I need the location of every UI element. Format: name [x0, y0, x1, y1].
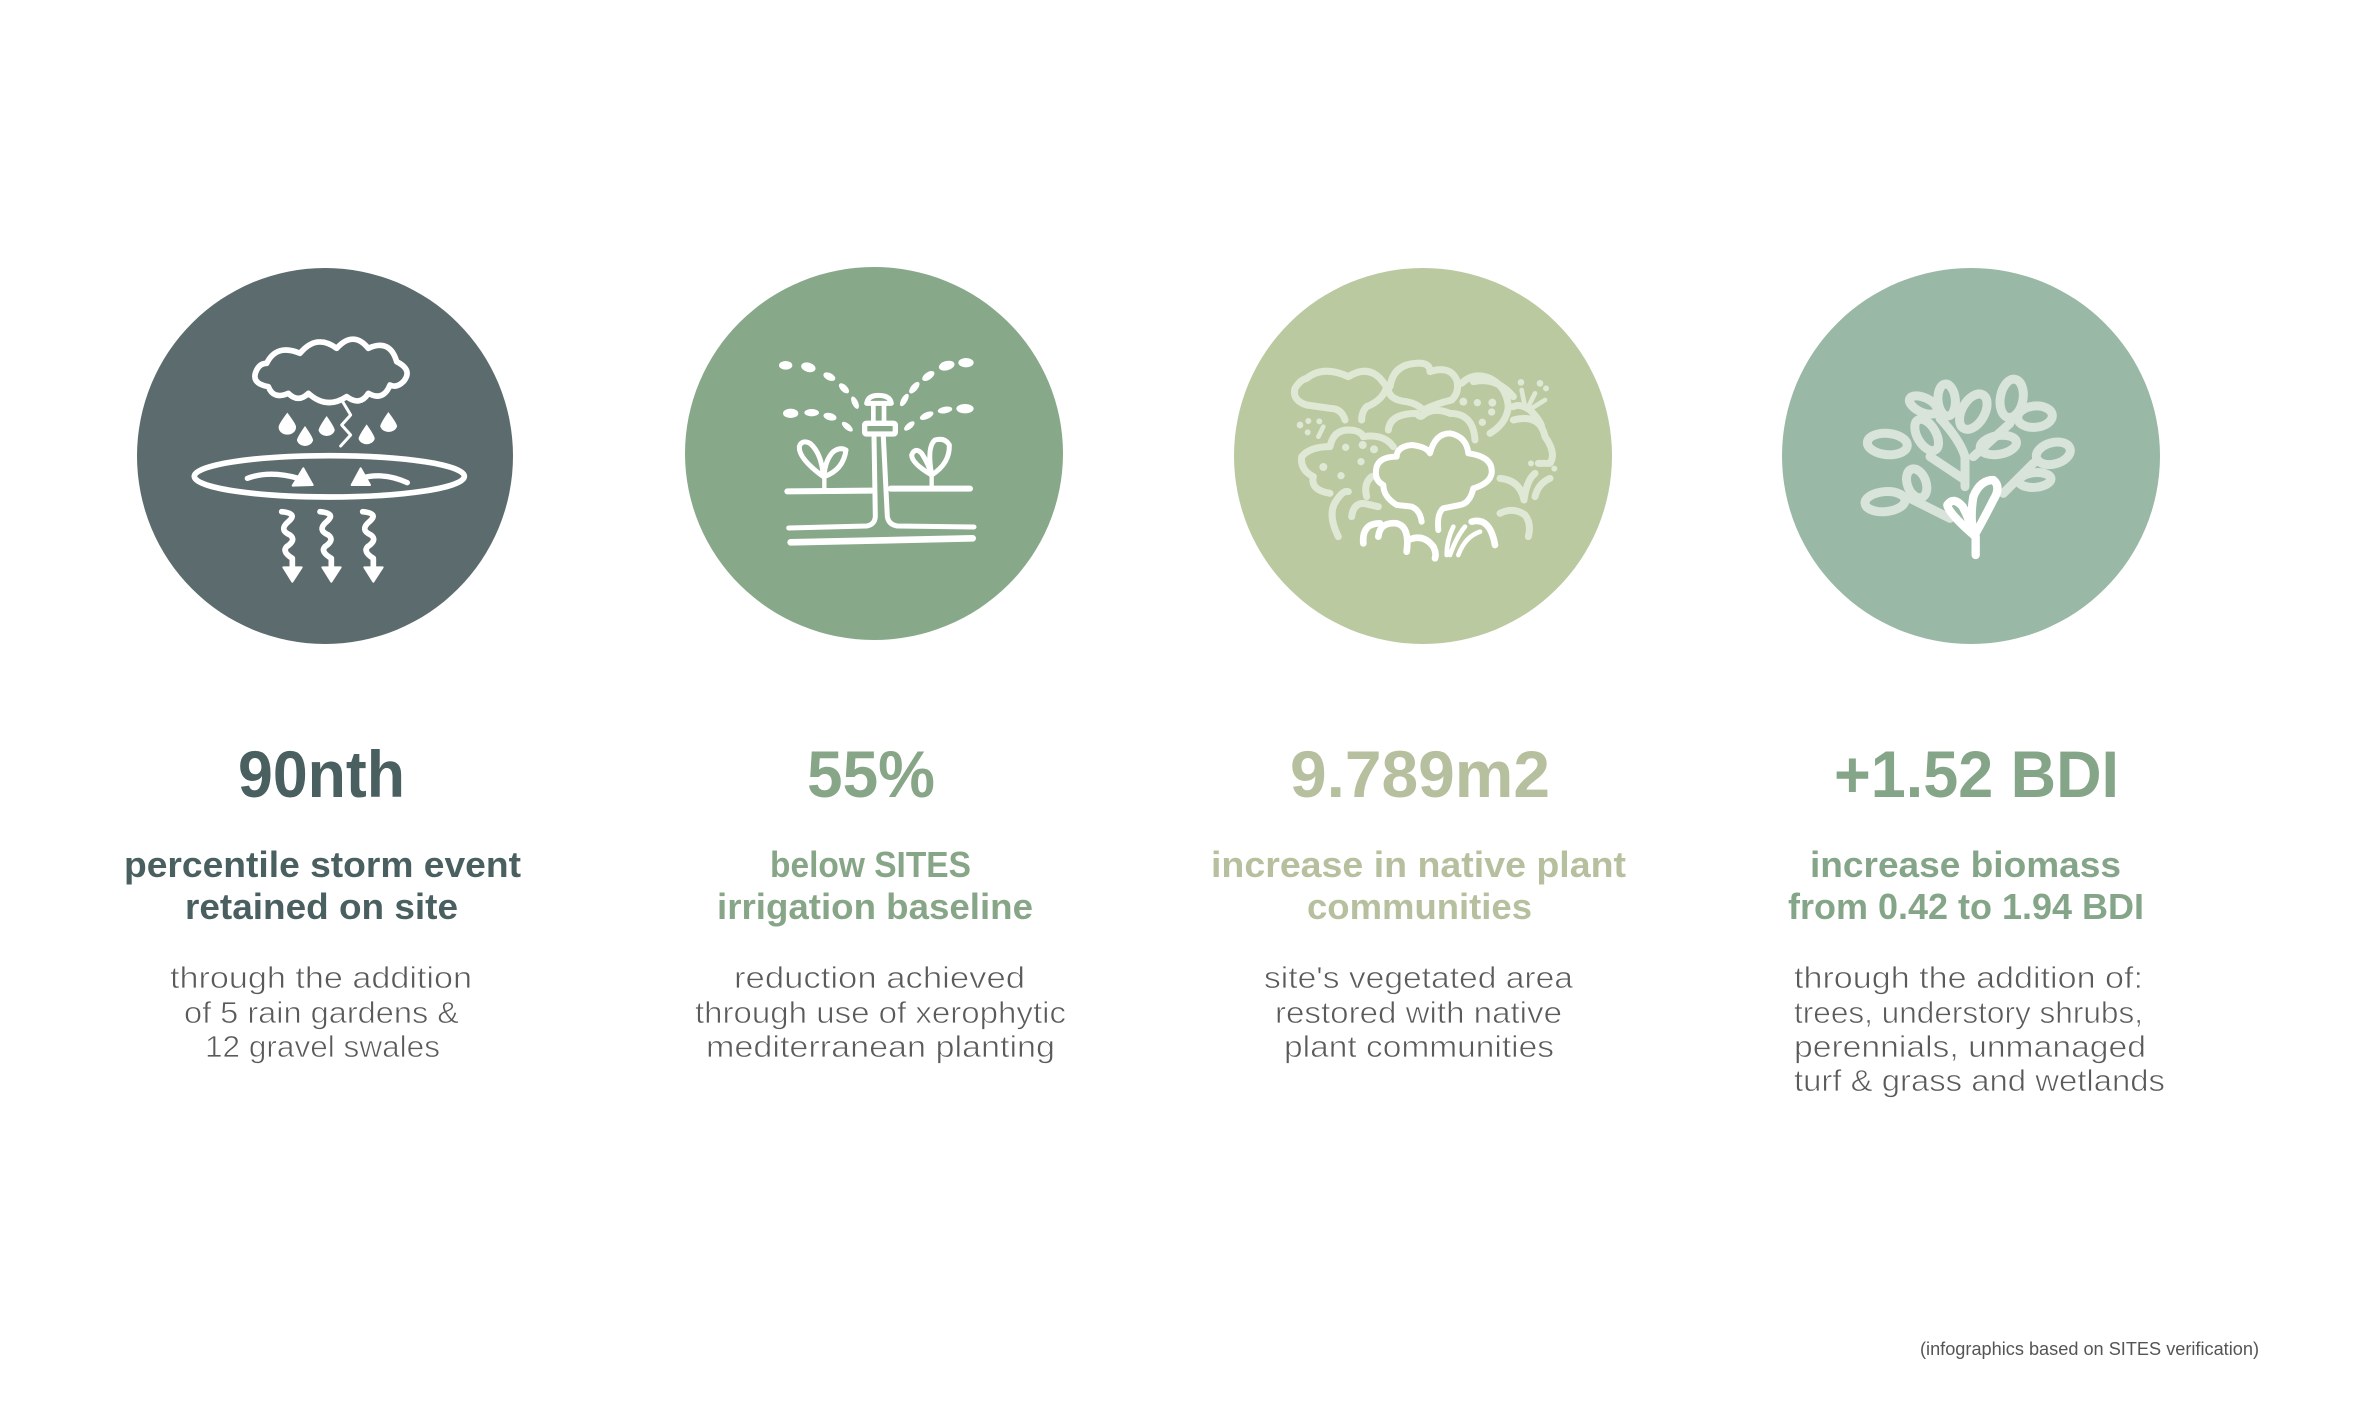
icon: storm cloud, retention basin and infiltration arrows — [194, 339, 464, 582]
circle: irrigation badge — [685, 267, 1063, 640]
heading: increase biomass from 0.42 to 1.94 BDI — [1788, 844, 2144, 927]
panel: storm event retention — [124, 268, 521, 1064]
text: biomass description: through the addition of: — [1794, 960, 2143, 995]
heading: increase biomass from 0.42 to 1.94 BDI: increase biomass — [1810, 844, 2121, 885]
heading: percentile storm event: percentile storm event — [124, 844, 521, 885]
icon: layered trees and shrubs — [1294, 363, 1557, 558]
text: irrigation description: through use of xerophytic — [695, 995, 1066, 1030]
heading: below SITES irrigation baseline — [717, 844, 1033, 927]
text: native plant description: site's vegetated area — [1264, 960, 1574, 995]
text: biomass description — [1794, 960, 2165, 1098]
circle: storm badge — [137, 268, 513, 644]
text: biomass description: perennials, unmanaged — [1794, 1029, 2146, 1064]
heading: increase in native plant communities: increase in native plant — [1211, 844, 1626, 885]
heading: percentile storm event — [124, 844, 521, 927]
heading: percentile storm event: retained on site — [185, 886, 458, 927]
panel: biomass increase — [1782, 268, 2165, 1098]
text: native plant description: plant communities — [1284, 1029, 1554, 1064]
stat: 9.789m2: 9.789m2 — [1290, 737, 1550, 811]
text: irrigation description: mediterranean planting — [706, 1029, 1055, 1064]
heading: below SITES irrigation baseline: irrigation baseline — [717, 886, 1033, 927]
icon: leafy branch — [1864, 377, 2073, 555]
text: storm description: through the addition — [170, 960, 472, 995]
heading: increase in native plant communities: communities — [1307, 886, 1532, 927]
text: irrigation description — [695, 960, 1066, 1064]
text: native plant description — [1264, 960, 1574, 1064]
text: storm description: 12 gravel swales — [205, 1029, 440, 1064]
heading: increase biomass from 0.42 to 1.94 BDI: from 0.42 to 1.94 BDI — [1788, 886, 2144, 927]
text: irrigation description: reduction achieved — [734, 960, 1025, 995]
circle: native plants badge — [1234, 268, 1612, 644]
stat: +1.52 BDI: +1.52 BDI — [1834, 737, 2119, 811]
footnote: (infographics based on SITES verification) — [1920, 1339, 2259, 1359]
text: storm description — [170, 960, 472, 1064]
text: biomass description: trees, understory shrubs, — [1794, 995, 2143, 1030]
heading: increase in native plant communities — [1211, 844, 1626, 927]
circle: biomass badge — [1782, 268, 2160, 644]
text: storm description: of 5 rain gardens & — [184, 995, 459, 1030]
panel: native plant communities — [1211, 268, 1626, 1064]
icon: sprinkler and seedlings — [779, 358, 974, 542]
text: native plant description: restored with native — [1275, 995, 1562, 1030]
stat: 90nth: 90nth — [238, 737, 405, 811]
heading: below SITES irrigation baseline: below SITES — [770, 844, 971, 885]
stat: 55%: 55% — [807, 737, 935, 811]
panel: irrigation reduction — [685, 267, 1066, 1064]
text: biomass description: turf & grass and wetlands — [1794, 1063, 2165, 1098]
